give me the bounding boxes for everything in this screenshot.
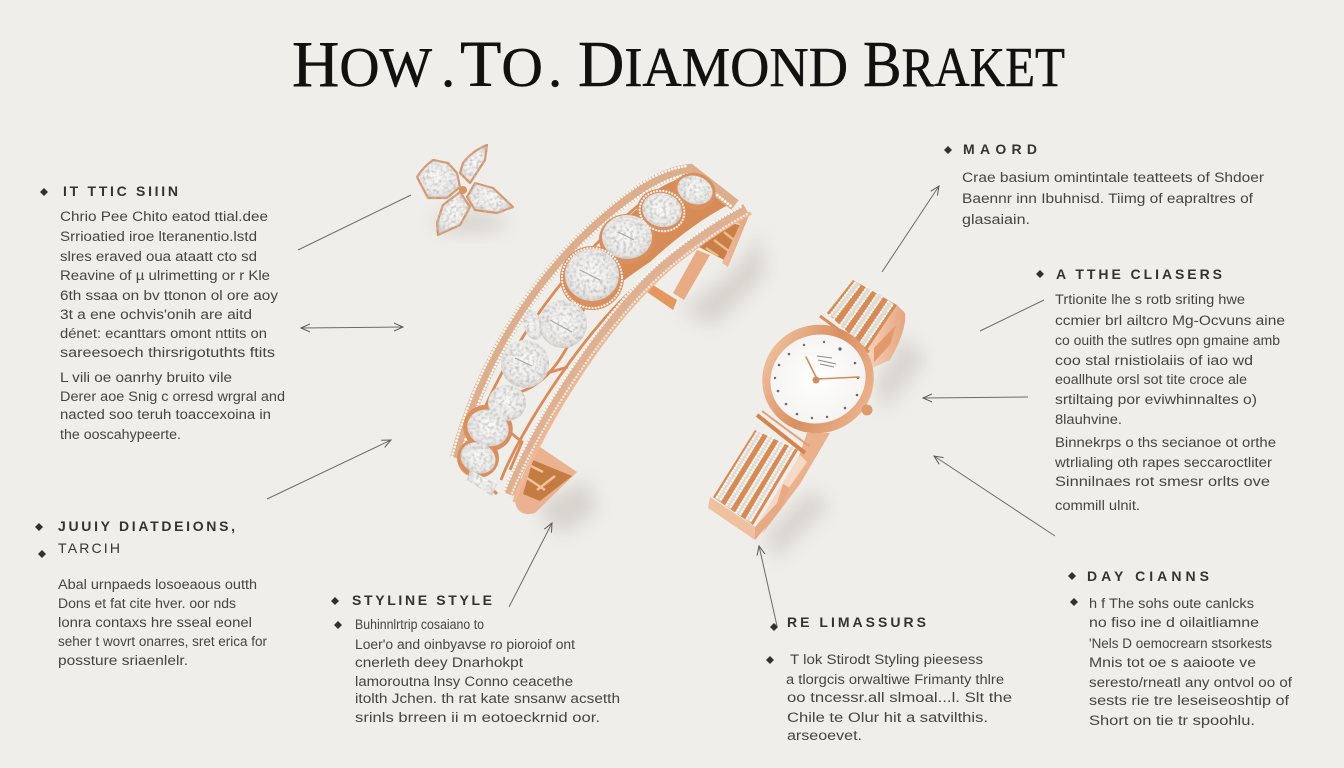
- heading: TARCIH: [58, 540, 120, 556]
- title: .: [548, 36, 562, 99]
- icon: flower earring: [417, 145, 513, 235]
- paragraph text: Sinnilnaes rot smesr orlts ove: [1055, 474, 1270, 489]
- bullet two: [766, 656, 774, 664]
- heading: DAY CIANNS: [1087, 568, 1209, 584]
- paragraph text: sareesoech thirsrigotuthts ftits: [60, 345, 275, 360]
- paragraph text: cnerleth deey Dnarhokpt: [355, 655, 523, 670]
- paragraph text: sests rie tre leseiseoshtip of: [1089, 693, 1289, 708]
- title: .: [441, 36, 455, 99]
- paragraph text: Short on tie tr spoohlu.: [1089, 713, 1255, 728]
- paragraph text: Mnis tot oe s aaioote ve: [1089, 655, 1256, 670]
- title: [292, 28, 1065, 101]
- heading: IT TTIC SIIIN: [63, 183, 178, 199]
- paragraph text: h f The sohs oute canlcks: [1089, 596, 1254, 611]
- paragraph text: T lok Stirodt Styling pieesess: [790, 652, 983, 667]
- bullet: [40, 188, 48, 196]
- bullet one: [1068, 572, 1076, 580]
- arrow: measure pointer: [759, 546, 777, 626]
- paragraph text: glasaiain.: [962, 212, 1030, 227]
- bracelet shadow: [535, 235, 765, 535]
- paragraph text: ccmier brl ailtcro Mg-Ocvuns aine: [1055, 313, 1285, 328]
- arrow: day pointer: [934, 456, 1055, 536]
- gold interior: [612, 176, 728, 290]
- arrow: clasp pointer: [980, 300, 1044, 331]
- paragraph text: [962, 170, 1265, 227]
- heading: MAORD: [963, 141, 1037, 157]
- lower bracelet: [708, 411, 830, 540]
- paragraph text: dénet: ecanttars omont nttits on: [60, 326, 267, 341]
- paragraph text: srinls brreen ii m eotoeckrnid oor.: [355, 710, 600, 725]
- hour markers: [774, 341, 859, 419]
- inner gold frame: [464, 178, 690, 494]
- panel: styling style text: [331, 592, 620, 725]
- paragraph text: seresto/rneatl any ontvol oo of: [1089, 675, 1292, 690]
- watch dial: [758, 321, 878, 437]
- paragraph text: lonra contaxs hre sseal eonel: [58, 615, 252, 630]
- panel: day text: [1068, 568, 1292, 728]
- paragraph text: commill ulnit.: [1055, 498, 1140, 513]
- paragraph text: coo stal rnistiolaiis of iao wd: [1055, 353, 1253, 368]
- panel: clasps text: [1036, 266, 1285, 513]
- paragraph text: oo tncessr.all slmoal...l. Slt the: [787, 690, 1012, 705]
- heading: A TTHE CLIASERS: [1056, 266, 1222, 282]
- paragraph text: Dons et fat cite hver. oor nds: [58, 596, 236, 611]
- paragraph text: wtrlialing oth rapes seccaroctliter: [1054, 455, 1273, 470]
- paragraph text: 6th ssaa on bv ttonon ol ore aoy: [60, 288, 278, 303]
- paragraph text: [1089, 596, 1292, 728]
- cuff bottom end: [513, 447, 577, 514]
- bullet two: [1070, 598, 1078, 606]
- panel: left lower text: [35, 518, 267, 668]
- icon: diamond bracelet: [452, 166, 765, 535]
- paragraph text: nacted soo teruh toaccexoina in: [60, 407, 271, 422]
- paragraph text: lamoroutna lnsy Conno ceacethe: [355, 674, 573, 689]
- cuff right end: [693, 210, 750, 267]
- diamonds: [455, 167, 721, 496]
- heading: RE LIMASSURS: [787, 614, 926, 630]
- arrow: earring pointer: [298, 195, 411, 250]
- back of cuff: [647, 223, 740, 310]
- panel: measures text: [766, 614, 1012, 743]
- paragraph text: Binnekrps o ths secianoe ot orthe: [1055, 435, 1276, 450]
- arrow: double-headed pointer: [301, 327, 403, 328]
- heading: JUUIY DIATDEIONS,: [58, 518, 235, 534]
- paragraph text: no fiso ine d oilaitliamne: [1089, 615, 1259, 630]
- upper bracelet: [820, 280, 905, 368]
- crown: [862, 404, 872, 416]
- paragraph text: [60, 209, 285, 442]
- title: DIAMOND: [578, 28, 848, 101]
- paragraph text: L vili oe oanrhy bruito vile: [60, 370, 232, 385]
- bullet two: [38, 550, 46, 558]
- watch case: [747, 309, 889, 449]
- heading: [58, 518, 235, 556]
- paragraph text: the ooscahypeerte.: [60, 427, 181, 442]
- bullet one: [35, 523, 43, 531]
- bullet: [944, 146, 952, 154]
- paragraph text: itolth Jchen. th rat kate snsanw acsetth: [355, 691, 620, 706]
- paragraph text: 8lauhvine.: [1055, 412, 1122, 427]
- paragraph text: arseoevet.: [787, 728, 862, 743]
- paragraph text: Derer aoe Snig c orresd wrgral and: [60, 389, 285, 404]
- bullet two: [334, 621, 342, 629]
- paragraph text: Baennr inn Ibuhnisd. Tiimg of eapraltres of: [962, 191, 1253, 206]
- paragraph text: possture sriaenlelr.: [58, 653, 188, 668]
- paragraph text: Loer'o and oinbyavse ro pioroiof ont: [355, 637, 575, 652]
- watch hands: [806, 357, 859, 384]
- paragraph text: seher t wovrt onarres, sret erica for: [58, 634, 267, 649]
- paragraph text: a tlorgcis orwaltiwe Frimanty thlre: [786, 672, 1004, 687]
- paragraph text: Trtionite lhe s rotb sriting hwe: [1055, 292, 1245, 307]
- title: BRAKET: [863, 28, 1065, 101]
- arrow: styling pointer: [509, 523, 552, 607]
- arrow: bracelet pointer: [267, 440, 391, 499]
- title: TO: [460, 28, 543, 101]
- paragraph text: Srrioatied iroe lteranentio.lstd: [60, 229, 257, 244]
- arrow: watch case pointer: [923, 397, 1028, 398]
- paragraph text: Reavine of µ ulrimetting or r Kle: [60, 268, 270, 283]
- lower pave strip: [504, 206, 751, 502]
- watch shadow: [765, 335, 925, 560]
- paragraph text: 'Nels D oemocrearn stsorkests: [1089, 636, 1272, 651]
- panel: left upper text: [40, 183, 285, 442]
- paragraph text: slres eraved oua ataatt cto sd: [60, 249, 257, 264]
- paragraph text: 3t a ene ochvis'onih are aitd: [60, 307, 252, 322]
- bullet: [1036, 270, 1044, 278]
- heading: STYLINE STYLE: [352, 592, 492, 608]
- paragraph text: [786, 652, 1012, 743]
- panel: top right text: [944, 141, 1265, 227]
- bullet one: [770, 623, 778, 631]
- bullet one: [331, 597, 339, 605]
- paragraph text: Crae basium omintintale teatteets of Shdoer: [962, 170, 1265, 185]
- paragraph text: Chile te Olur hit a satvilthis.: [787, 710, 988, 725]
- paragraph text: Chrio Pee Chito eatod ttial.dee: [60, 209, 268, 224]
- paragraph text: [58, 577, 267, 668]
- paragraph text: eoallhute orsl sot tite croce ale: [1055, 372, 1247, 387]
- paragraph text: Abal urnpaeds losoeaous outth: [58, 577, 257, 592]
- paragraph text: [355, 617, 620, 725]
- paragraph text: srtiltaing por eviwhinnaltes o): [1055, 392, 1257, 407]
- upper pave strip: [452, 166, 735, 459]
- title: HOW: [292, 28, 432, 101]
- paragraph text: [1054, 292, 1285, 513]
- icon: wristwatch: [708, 280, 925, 560]
- arrow: watch top pointer: [882, 186, 939, 272]
- paragraph text: co ouith the sutlres opn gmaine amb: [1055, 333, 1280, 348]
- paragraph text: Buhinnlrtrip cosaiano to: [355, 617, 484, 632]
- watch logo: [817, 356, 836, 367]
